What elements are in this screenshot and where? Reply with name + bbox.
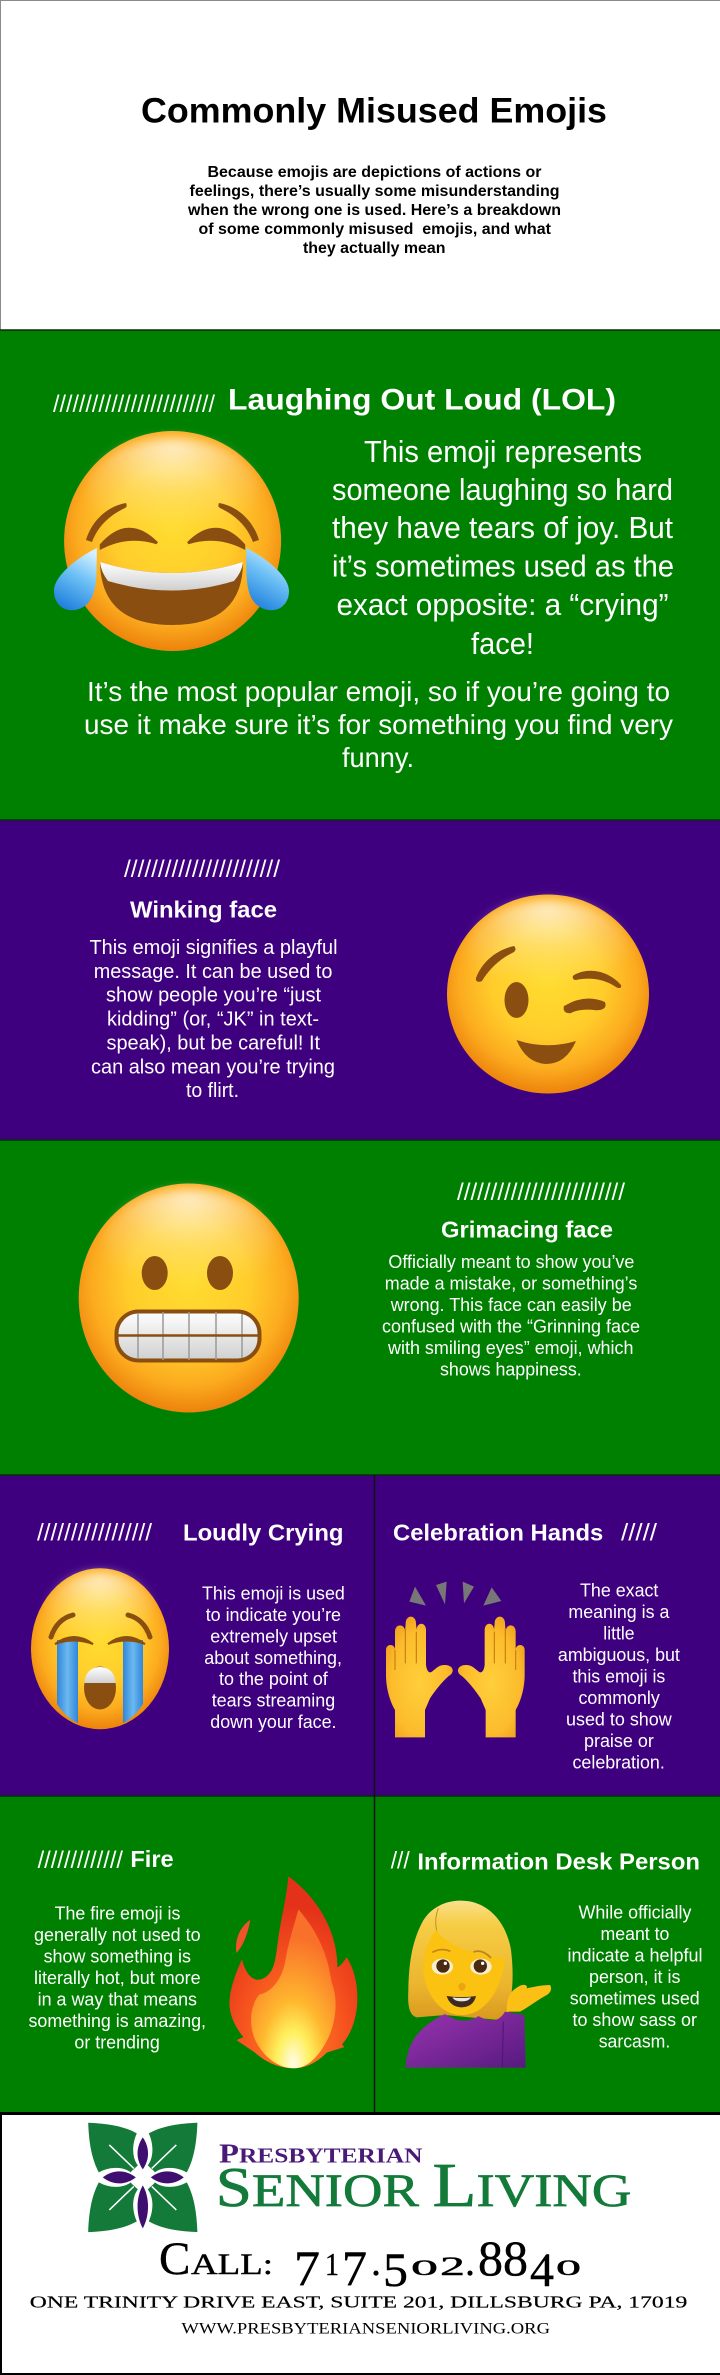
body text: Officially meant to show you’ve xyxy=(388,1251,634,1272)
title: Commonly Misused Emojis xyxy=(141,92,607,130)
body text: While officially xyxy=(578,1902,692,1922)
icon: woman tipping hand xyxy=(406,1901,551,2068)
phone number: 7 xyxy=(342,2240,367,2296)
address: ONE TRINITY DRIVE EAST, SUITE 201, DILLSBURG PA, 17019 xyxy=(30,2292,687,2311)
body text: with smiling eyes” emoji, which xyxy=(387,1337,634,1358)
panel: fire xyxy=(0,1796,374,2113)
body text: made a mistake, or something’s xyxy=(385,1272,637,1294)
body text: this emoji is xyxy=(572,1666,665,1686)
phone number: 0 xyxy=(411,2255,438,2280)
body text: LOL description xyxy=(332,434,674,661)
phone number: 0 xyxy=(556,2255,581,2280)
phone number: 1 xyxy=(325,2246,339,2282)
icon: logo xyxy=(88,2123,197,2232)
heading: Loudly Crying: Loudly Crying xyxy=(183,1520,344,1546)
body text: LOL description: someone laughing so hard xyxy=(332,472,673,507)
body text: commonly xyxy=(578,1687,661,1708)
body text: generally not used to xyxy=(34,1924,201,1945)
body text: tears streaming xyxy=(212,1690,335,1710)
phone number: 2 xyxy=(440,2252,465,2281)
body text: little xyxy=(603,1622,634,1644)
phone number: 5 xyxy=(383,2244,408,2297)
body text: show people you’re “just xyxy=(106,984,321,1006)
body text: in a way that means xyxy=(38,1988,197,2010)
icon: winking face xyxy=(447,894,649,1094)
body text: LOL description: it’s sometimes used as the xyxy=(332,548,674,584)
panel: grimacing face xyxy=(0,1140,720,1475)
body text: sarcasm. xyxy=(599,2030,670,2052)
slashes: ///// xyxy=(621,1520,657,1546)
panel: loudly crying xyxy=(0,1475,374,1796)
body text: extremely upset xyxy=(210,1626,337,1646)
body text: meant to xyxy=(600,1923,669,1944)
icon: raising hands xyxy=(386,1582,525,1737)
body text: or trending xyxy=(74,2032,160,2052)
icon: crying face xyxy=(31,1568,169,1729)
phone number: 7 xyxy=(294,2240,320,2296)
body text: to indicate you’re xyxy=(206,1604,341,1625)
body text: popularity note: funny. xyxy=(342,742,414,773)
body text: indicate a helpful xyxy=(568,1944,702,1966)
slashes: ///////////////////////// xyxy=(457,1179,625,1206)
body text xyxy=(90,937,338,1102)
phone number: . xyxy=(465,2239,475,2284)
body text xyxy=(568,1902,702,2052)
body text: popularity note xyxy=(84,676,673,773)
intro text: Because emojis are depictions of actions or xyxy=(208,164,542,181)
body text: person, it is xyxy=(589,1966,680,1987)
body text xyxy=(28,1902,206,2052)
body text: LOL description: they have tears of joy. But xyxy=(332,510,673,545)
body text: The exact xyxy=(580,1580,658,1600)
body text: popularity note: It’s the most popular emoji, so if you’re going to xyxy=(87,676,670,707)
website: WWW.PRESBYTERIANSENIORLIVING.ORG xyxy=(181,2320,551,2337)
heading: Winking face: Winking face xyxy=(130,896,277,922)
body text: kidding” (or, “JK” in text- xyxy=(107,1008,319,1030)
body text: to show sass or xyxy=(572,2009,697,2030)
slashes: ///////////////// xyxy=(37,1520,152,1546)
heading: Laughing Out Loud: Laughing Out Loud (LOL) xyxy=(228,384,616,416)
intro text: they actually mean xyxy=(303,240,446,257)
intro text: when the wrong one is used. Here’s a breakdown xyxy=(187,202,561,219)
body text: used to show xyxy=(566,1708,672,1730)
body text: show something is xyxy=(44,1946,191,1966)
body text: shows happiness. xyxy=(440,1358,582,1380)
body text: popularity note: use it make sure it’s for something you find very xyxy=(84,709,673,740)
body text: message. It can be used to xyxy=(94,961,332,983)
slashes: ///////////////////////// xyxy=(53,391,215,418)
body text: This emoji is used xyxy=(202,1582,345,1604)
panel: information desk person xyxy=(374,1796,720,2113)
body text: something is amazing, xyxy=(28,2010,206,2031)
panel: laughing out loud xyxy=(0,330,720,820)
icon: grimacing face xyxy=(79,1184,299,1412)
body text: celebration. xyxy=(572,1752,665,1772)
intro text: of some commonly misused emojis, and what xyxy=(198,221,551,238)
phone number: . xyxy=(371,2239,381,2284)
phone number: 8 xyxy=(478,2230,503,2286)
phone number: 4 xyxy=(530,2244,554,2297)
body text xyxy=(202,1582,345,1732)
body text: praise or xyxy=(584,1730,654,1751)
icon: face with tears of joy xyxy=(54,431,289,651)
body text: This emoji signifies a playful xyxy=(90,937,338,959)
body text: meaning is a xyxy=(568,1601,670,1622)
brand name: SENIOR LIVING xyxy=(216,2152,631,2220)
body text: LOL description: face! xyxy=(471,626,534,661)
phone number: ALL: xyxy=(191,2248,273,2281)
slashes: /// xyxy=(391,1848,410,1874)
panel: celebration hands xyxy=(374,1475,720,1796)
body text: down your face. xyxy=(210,1711,336,1732)
slashes: ///////////// xyxy=(38,1847,123,1874)
body text xyxy=(558,1580,680,1772)
panel: winking face xyxy=(0,820,720,1140)
intro text xyxy=(187,164,561,257)
brand name: PRESBYTERIAN xyxy=(219,2138,422,2168)
body text: can also mean you’re trying xyxy=(91,1056,335,1078)
heading: Grimacing face: Grimacing face xyxy=(441,1216,613,1242)
body text: about something, xyxy=(204,1647,342,1668)
body text: LOL description: exact opposite: a “crying” xyxy=(336,587,668,622)
body text: to the point of xyxy=(219,1668,329,1689)
heading: Fire: Fire xyxy=(130,1846,174,1872)
body text: to flirt. xyxy=(186,1080,239,1102)
panel: footer xyxy=(0,2113,720,2375)
body text: speak), but be careful! It xyxy=(106,1032,320,1054)
body text: sometimes used xyxy=(570,1988,700,2008)
body text: The fire emoji is xyxy=(55,1902,180,1924)
body text: wrong. This face can easily be xyxy=(390,1294,632,1315)
heading: Celebration Hands: Celebration Hands xyxy=(393,1520,603,1546)
body text: confused with the “Grinning face xyxy=(382,1316,640,1336)
phone number: 8 xyxy=(503,2230,528,2286)
body text: literally hot, but more xyxy=(34,1967,201,1988)
intro text: feelings, there’s usually some misunderstanding xyxy=(190,183,560,200)
icon: fire xyxy=(229,1876,357,2068)
heading: Information Desk Person: Information Desk Person xyxy=(417,1849,700,1875)
phone number: C xyxy=(159,2233,190,2285)
body text: ambiguous, but xyxy=(558,1644,680,1665)
slashes: /////////////////////// xyxy=(124,856,280,883)
panel: header xyxy=(0,0,720,330)
body text: LOL description: This emoji represents xyxy=(364,434,642,469)
body text xyxy=(382,1251,640,1380)
